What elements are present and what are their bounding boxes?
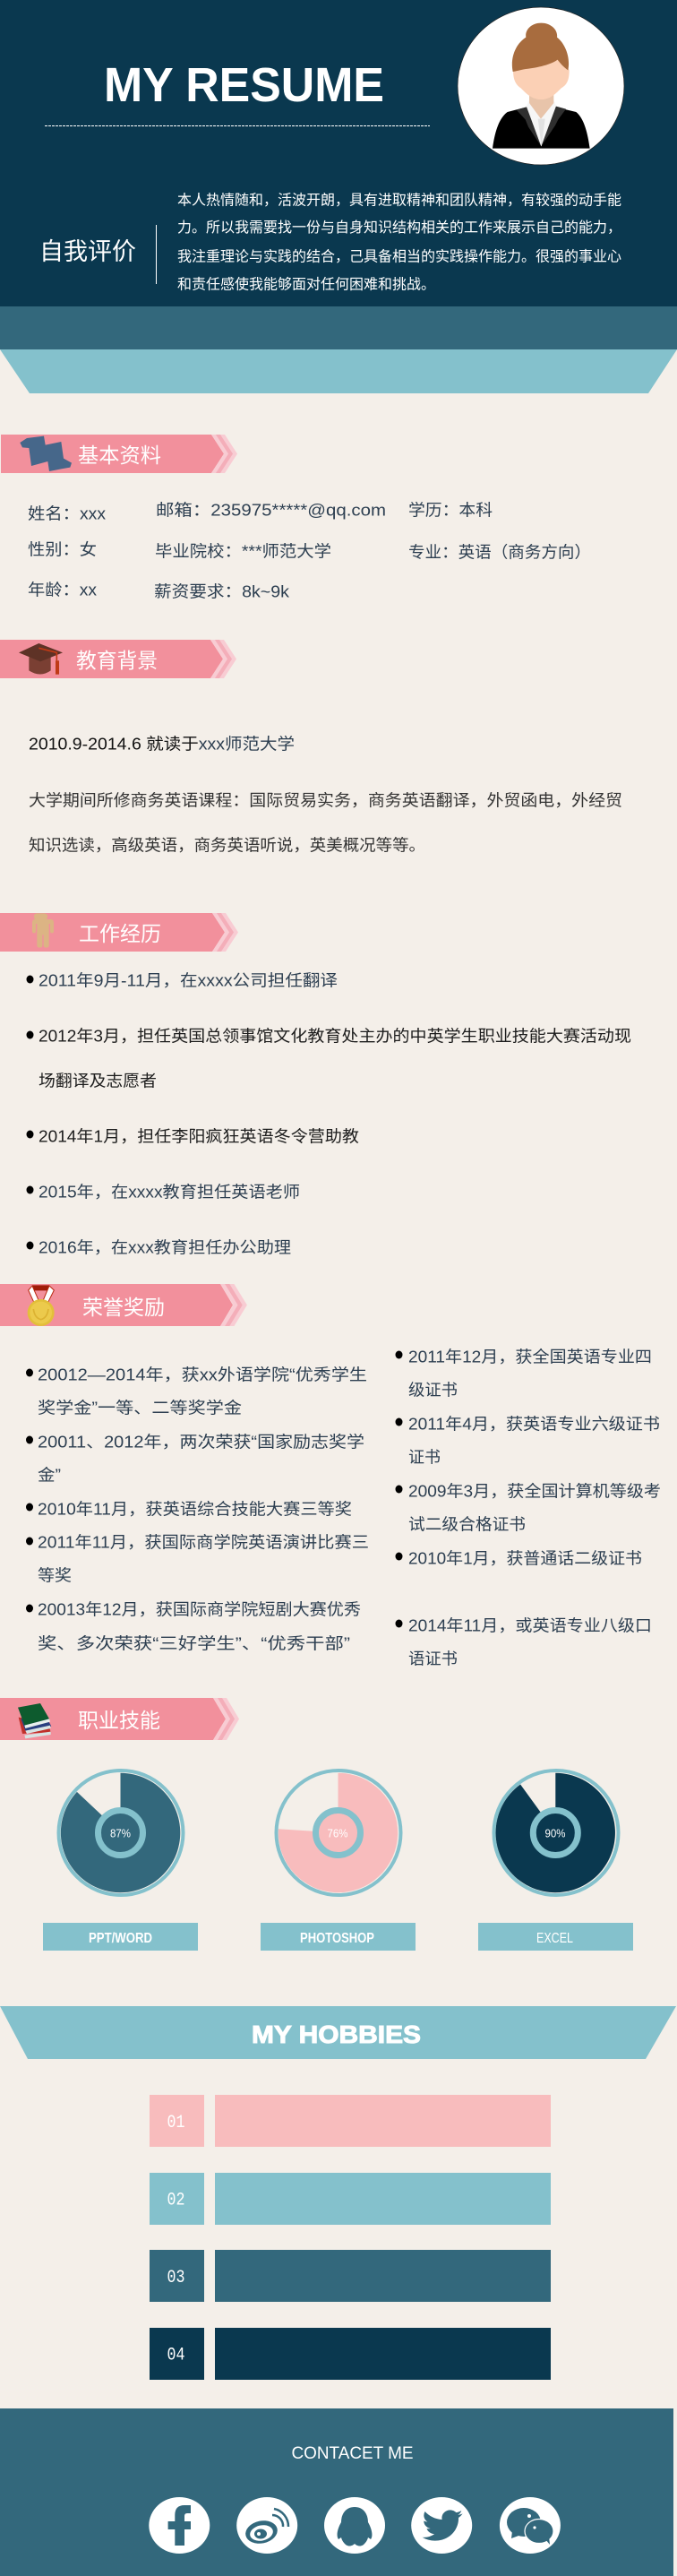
hobby row 04 (150, 2328, 551, 2380)
text block: basic info: 专业：英语（商务方向） (408, 543, 591, 561)
label: EXCEL: EXCEL (536, 1931, 573, 1946)
text block: honors right column: 2011年4月，获英语专业六级证书 (408, 1416, 660, 1434)
heading: work experience banner (0, 913, 238, 952)
text block: work experience list: 场翻译及志愿者 (39, 1072, 157, 1090)
text block: self evaluation paragraph: 和责任感使我能够面对任何困难和挑战。 (177, 276, 435, 292)
text block: education (29, 735, 622, 855)
hobby row 01 (150, 2095, 551, 2147)
text block: work experience list: 2011年9月-11月，在xxxx公司担任翻译 (39, 971, 338, 989)
heading: honors banner (0, 1284, 247, 1326)
icon: twitter bird (411, 2497, 472, 2554)
text block: basic info: 学历：本科 (408, 502, 493, 520)
chart: Photoshop donut 76% (276, 1770, 401, 1895)
icon: graduation cap (19, 643, 63, 675)
hobby row 04: 04 (167, 2346, 184, 2365)
text block: self evaluation paragraph (177, 192, 621, 292)
text block: self evaluation paragraph: 我注重理论与实践的结合，己具备相当的实践操作能力。很强的事业心 (177, 249, 621, 265)
label: PHOTOSHOP (261, 1923, 416, 1951)
text block: education: 知识选读，高级英语，商务英语听说，英美概况等等。 (29, 837, 425, 855)
text block: work experience list: 2012年3月，担任英国总领事馆文化教育处主办的中英学生职业技能大赛活动现 (39, 1027, 631, 1045)
text block: honors right column (396, 1348, 661, 1668)
text block: honors left column (26, 1366, 369, 1652)
panel: header (0, 0, 677, 306)
text block: basic info: 邮箱：235975*****@qq.com (156, 502, 386, 520)
text block: honors right column: 语证书 (408, 1650, 458, 1668)
chart: Photoshop donut 76%: 76% (328, 1826, 348, 1840)
icon: wechat (500, 2497, 561, 2554)
label: PPT/WORD: PPT/WORD (89, 1931, 152, 1946)
icon: facebook (149, 2497, 210, 2554)
text block: basic info: 姓名：xxx (28, 505, 106, 523)
heading: skills banner: 职业技能 (78, 1709, 160, 1732)
text block: self evaluation paragraph: 力。所以我需要找一份与自身知识结构相关的工作来展示自己的能力， (177, 220, 621, 236)
text block: honors right column: 试二级合格证书 (408, 1516, 526, 1534)
text block: honors left column: 20012—2014年，获xx外语学院“优秀学生 (38, 1366, 367, 1383)
heading: work experience banner: 工作经历 (79, 922, 161, 945)
heading: my hobbies banner: MY HOBBIES (252, 2020, 421, 2048)
icon: blue zigzag (20, 436, 72, 471)
heading: basic info banner: 基本资料 (78, 444, 161, 467)
text block: work experience list: 2014年1月，担任李阳疯狂英语冬令营助教 (39, 1127, 359, 1145)
text block: honors left column: 奖、多次荣获“三好学生”、“优秀干部” (38, 1634, 350, 1652)
band: teal trapezoid (0, 349, 677, 393)
chart: Excel donut 90% (494, 1770, 618, 1895)
text block: honors right column: 证书 (408, 1448, 441, 1466)
heading: self evaluation: 自我评价 (39, 238, 136, 265)
hobby row 02: 02 (167, 2190, 184, 2211)
heading: skills banner (0, 1698, 239, 1740)
text block: honors left column: 20011、2012年，两次荣获“国家励志奖学 (38, 1434, 364, 1452)
text block: honors left column: 金” (38, 1466, 61, 1484)
text block: basic info: 毕业院校：***师范大学 (155, 543, 331, 561)
text block: honors right column: 2009年3月，获全国计算机等级考 (408, 1482, 661, 1500)
icon: weibo (236, 2497, 297, 2554)
label: PPT/WORD (43, 1923, 198, 1951)
panel: footer contact (0, 2408, 673, 2576)
label: PHOTOSHOP: PHOTOSHOP (300, 1931, 374, 1946)
heading: contact me: CONTACET ME (292, 2443, 414, 2463)
text block: basic info: 薪资要求：8k~9k (154, 582, 290, 600)
hobby row 03: 03 (167, 2268, 184, 2288)
chart: PPT/WORD donut 87% (59, 1770, 183, 1895)
text block: honors right column: 级证书 (408, 1382, 458, 1400)
text block: education: 大学期间所修商务英语课程：国际贸易实务，商务英语翻译，外贸函电，外经贸 (29, 792, 622, 810)
label: EXCEL (478, 1923, 633, 1951)
text block: education: 2010.9-2014.6 就读于 xxx师范大学 (29, 735, 295, 753)
icon: qq penguin (324, 2497, 385, 2554)
heading: education banner (0, 640, 236, 678)
hobby row 01: 01 (167, 2113, 184, 2133)
hobby row 03 (150, 2250, 551, 2302)
text block: basic info (28, 502, 591, 600)
icon: person (30, 913, 54, 948)
text block: honors left column: 2011年11月，获国际商学院英语演讲比赛三 (38, 1534, 369, 1552)
text block: basic info: 性别：女 (28, 541, 97, 559)
icon: gold medal (28, 1285, 55, 1326)
text block: basic info: 年龄：xx (28, 581, 97, 599)
title: MY RESUME (104, 58, 384, 112)
heading: honors banner: 荣誉奖励 (82, 1296, 165, 1319)
text block: work experience list: 2016年，在xxx教育担任办公助理 (39, 1238, 291, 1256)
text block: honors right column: 2014年11月，或英语专业八级口 (408, 1616, 652, 1634)
chart: PPT/WORD donut 87%: 87% (110, 1826, 131, 1840)
icon: stack of books (18, 1703, 51, 1738)
text block: work experience list: 2015年，在xxxx教育担任英语老师 (39, 1183, 300, 1201)
chart: Excel donut 90%: 90% (544, 1826, 566, 1840)
band: header lower stripe (0, 306, 677, 349)
text block: honors left column: 奖学金”一等、二等奖学金 (38, 1400, 242, 1417)
text block: honors left column: 2010年11月，获英语综合技能大赛三等奖 (38, 1500, 352, 1518)
heading: my hobbies banner (0, 2006, 676, 2059)
heading: education banner: 教育背景 (76, 649, 158, 672)
hobby row 02 (150, 2173, 551, 2225)
text block: honors left column: 等奖 (38, 1566, 72, 1584)
text block: honors right column: 2010年1月，获普通话二级证书 (408, 1550, 642, 1568)
text block: honors left column: 20013年12月，获国际商学院短剧大赛优秀 (38, 1600, 361, 1618)
icon: profile portrait (458, 7, 624, 165)
text block: self evaluation paragraph: 本人热情随和，活波开朗，具有进取精神和团队精神，有较强的动手能 (177, 192, 621, 208)
heading: basic info banner (1, 435, 237, 473)
text block: honors right column: 2011年12月，获全国英语专业四 (408, 1348, 652, 1366)
text block: work experience list (27, 971, 631, 1256)
